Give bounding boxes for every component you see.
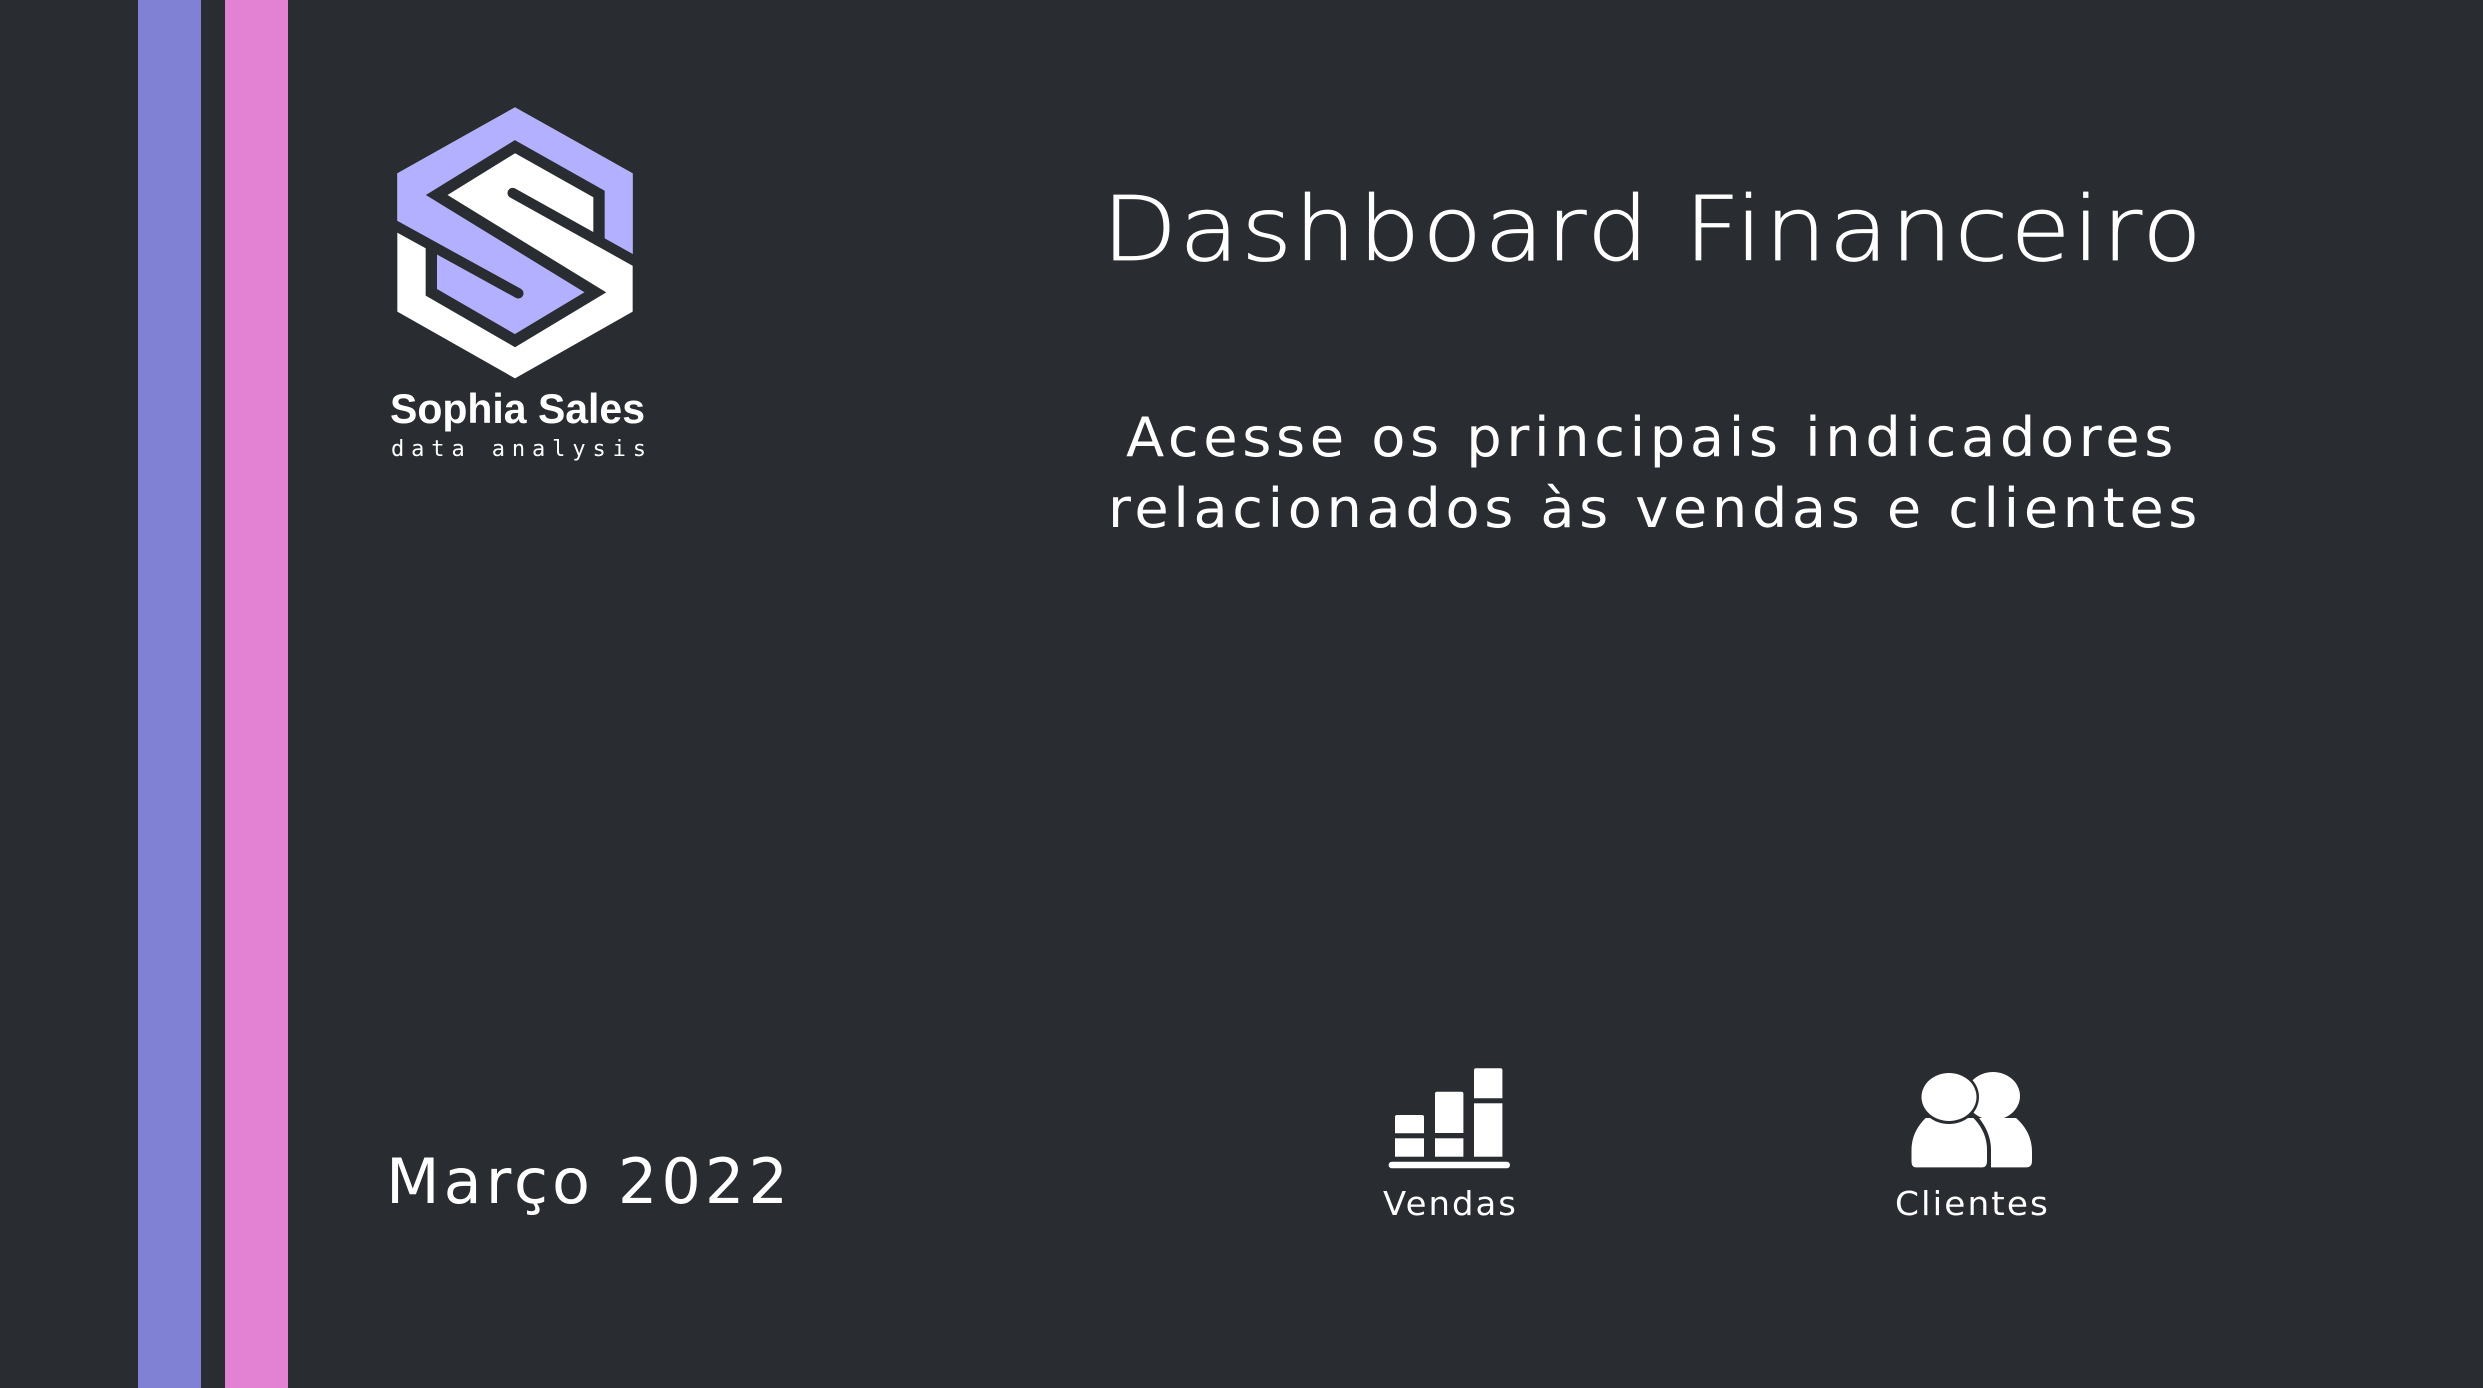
- pink vertical stripe: [225, 0, 288, 1388]
- subtitle: [1108, 406, 2202, 540]
- nav item: Vendas: [1383, 1068, 1518, 1223]
- title: Dashboard Financeiro: [1102, 177, 2204, 281]
- logo tagline: data analysis: [391, 437, 646, 462]
- icon: bar chart: [1389, 1068, 1510, 1168]
- subtitle: relacionados às vendas e clientes: [1108, 477, 2202, 540]
- label: Vendas: Vendas: [1383, 1184, 1518, 1223]
- purple vertical stripe: [138, 0, 201, 1388]
- logo icon: hexagon S: [395, 107, 635, 378]
- logo wordmark: Sophia Sales: [390, 385, 645, 432]
- subtitle: Acesse os principais indicadores: [1126, 406, 2178, 469]
- icon: people: [1910, 1070, 2032, 1169]
- nav item: Clientes: [1895, 1070, 2050, 1223]
- label: Clientes: Clientes: [1895, 1184, 2050, 1223]
- date: Março 2022: [386, 1145, 792, 1218]
- logo: Sophia Sales: [390, 107, 646, 462]
